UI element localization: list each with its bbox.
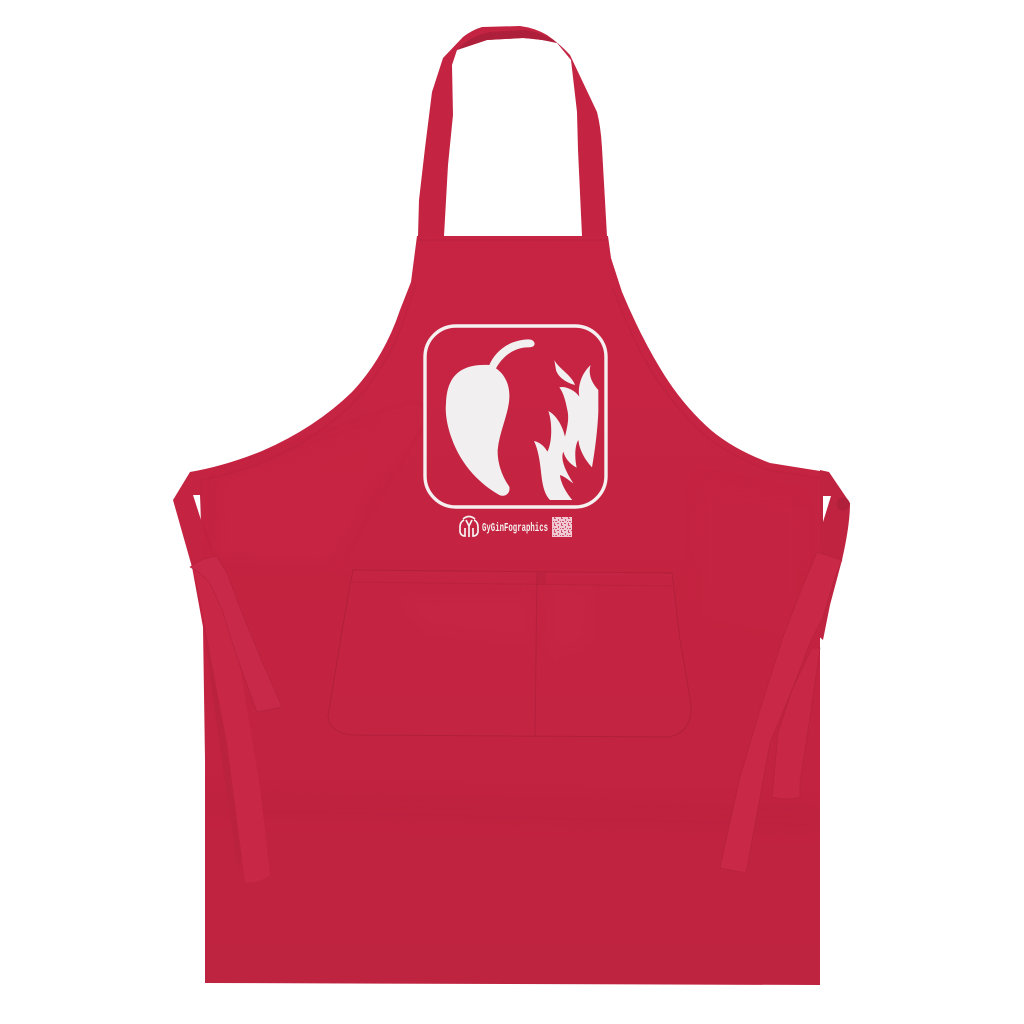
right ties: [720, 498, 850, 873]
brand name: GyGinFographics: [482, 521, 548, 535]
button: [836, 498, 850, 510]
armhole hems: [201, 284, 820, 556]
side openings: [193, 495, 831, 522]
bib top hem: [417, 239, 608, 241]
icon: flames: [534, 360, 598, 500]
apron body: [173, 236, 820, 985]
icon: chili pepper: [446, 339, 535, 496]
printed logo: [425, 326, 606, 537]
right long tie: [720, 552, 842, 873]
apron product illustration: [173, 26, 850, 985]
QR code: [552, 517, 572, 537]
icon: brand mark: [460, 516, 478, 537]
left long tie: [192, 567, 270, 882]
brand line: [460, 516, 572, 537]
left ties: [190, 557, 282, 882]
front pocket: [328, 570, 691, 737]
right short tie: [772, 648, 820, 799]
neck strap: [418, 26, 607, 236]
rounded square frame: [425, 326, 606, 507]
right side strap loop: [800, 470, 850, 640]
fabric shading: [205, 410, 820, 830]
left short tie: [190, 557, 282, 712]
left under-tie strip: [203, 620, 256, 870]
